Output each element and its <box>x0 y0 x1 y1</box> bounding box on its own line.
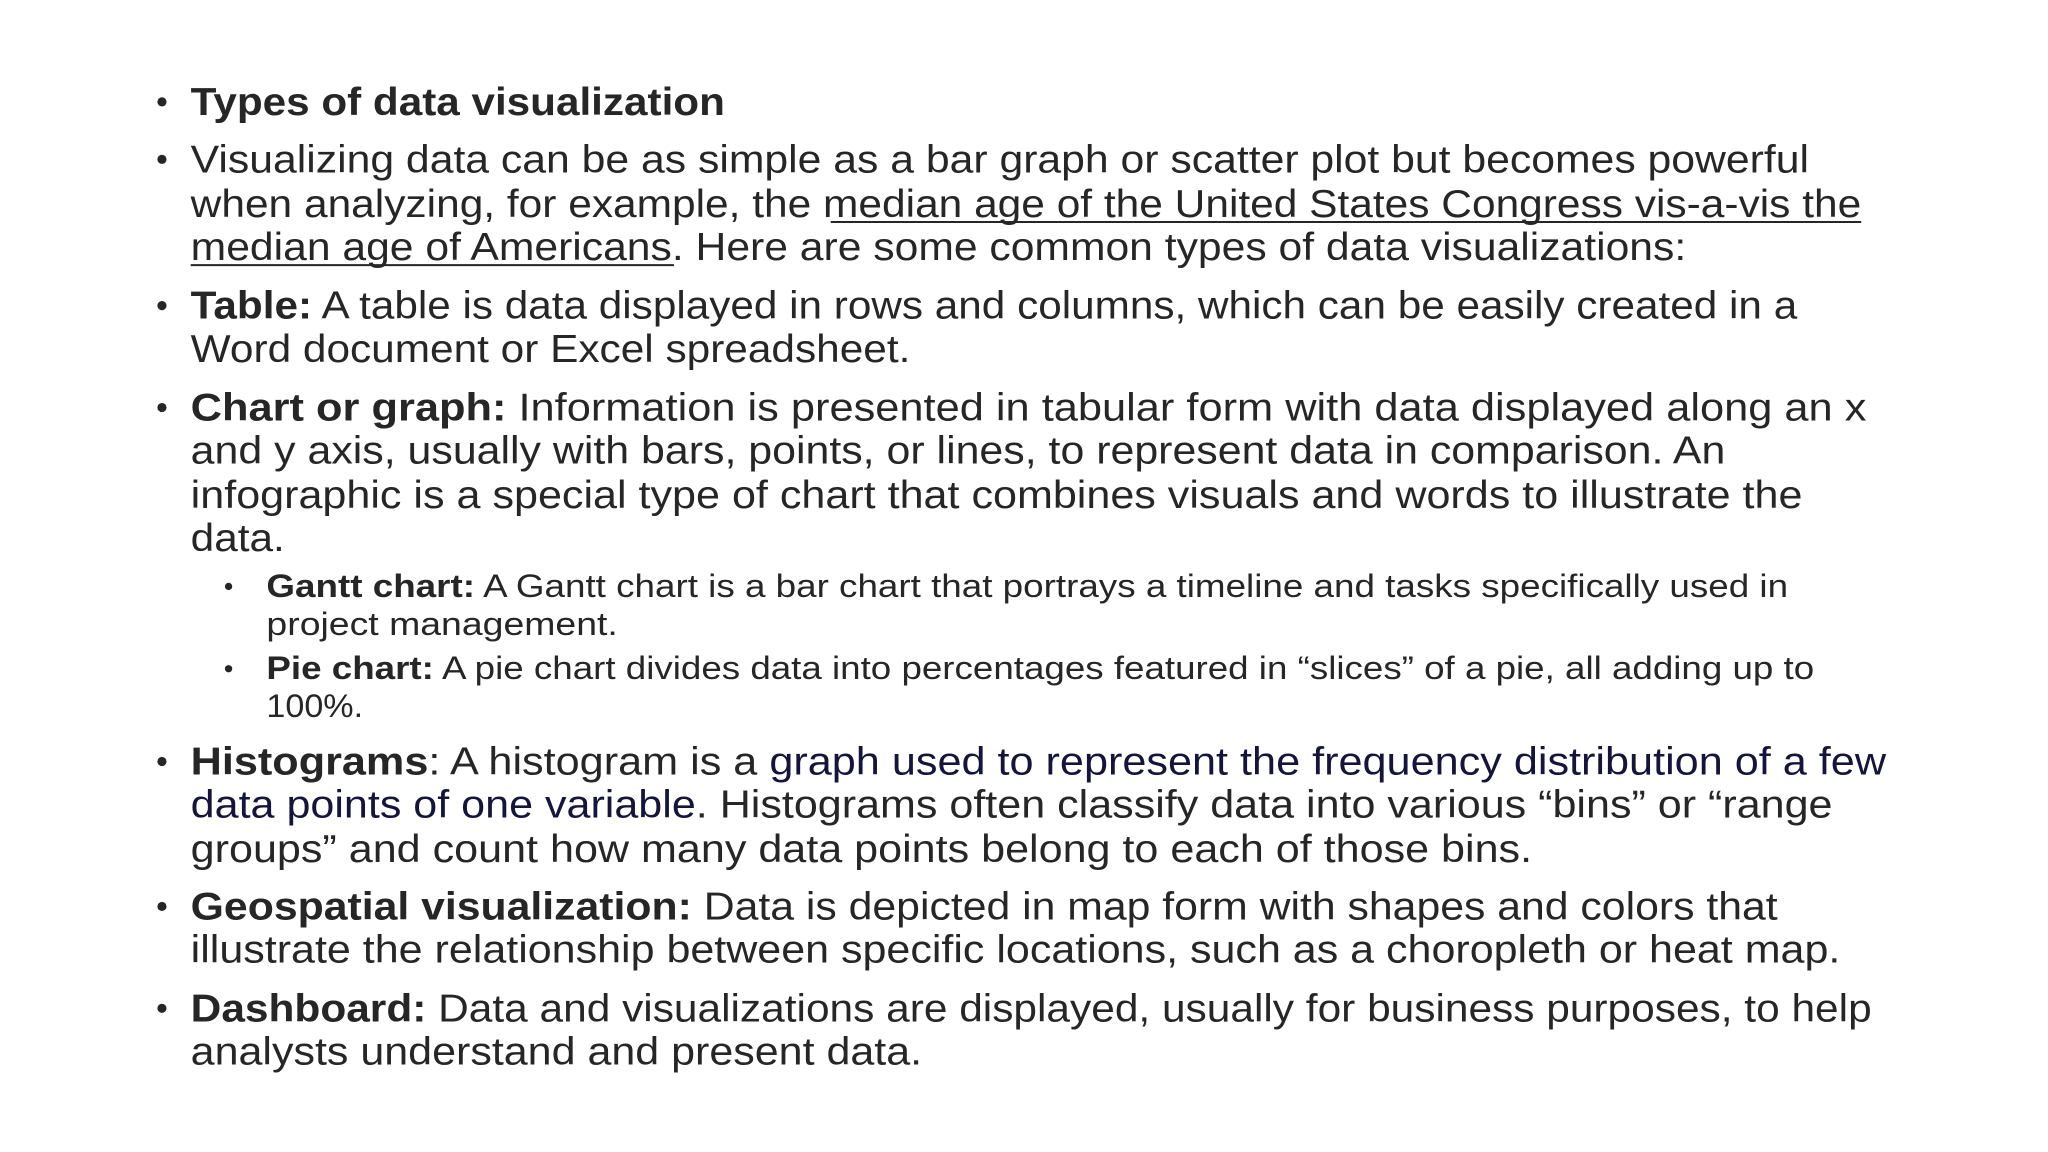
bullet: geospatial <box>157 886 1840 972</box>
sub-bullet: gantt chart: Gantt chart: A Gantt chart is a bar chart that portrays a timeline and tasks specifically used in <box>266 568 1788 604</box>
bullet: types heading: Types of data visualization <box>191 81 725 124</box>
bullet: table: Table: A table is data displayed in rows and columns, which can be easily created in a <box>191 285 1797 328</box>
bullet: histograms <box>157 741 1887 871</box>
bullet: histograms: groups” and count how many data points belong to each of those bins. <box>191 828 1532 871</box>
bullet: table: Word document or Excel spreadsheet. <box>191 328 910 371</box>
bullet: intro paragraph <box>157 138 1861 269</box>
bullet: table <box>157 285 1797 371</box>
sub-bullet: pie chart <box>225 650 1814 724</box>
bullet: histograms: Histograms : A histogram is a graph used to represent the frequency distribution of a few <box>191 741 1887 784</box>
bullet: chart or graph: and y axis, usually with bars, points, or lines, to represent data in comparison. An <box>191 430 1725 473</box>
bullet: dashboard <box>157 987 1872 1073</box>
bullet: geospatial: Geospatial visualization: Data is depicted in map form with shapes and colors that <box>191 886 1778 929</box>
bullet: chart or graph <box>157 387 1867 560</box>
bullet: intro paragraph: median age of Americans. Here are some common types of data visualizations: <box>191 226 1686 269</box>
bullet: intro paragraph: Visualizing data can be as simple as a bar graph or scatter plot but becomes powerful <box>191 138 1809 181</box>
bullet: chart or graph: infographic is a special type of chart that combines visuals and words to illustrate the <box>191 474 1802 517</box>
bullet: intro paragraph: when analyzing, for example, the median age of the United States Congress vis-a-vis the <box>190 183 1861 226</box>
bullet: chart or graph: Chart or graph: Information is presented in tabular form with data displayed along an x <box>191 387 1867 430</box>
bullet: dashboard: analysts understand and present data. <box>191 1030 922 1073</box>
bullet: chart or graph: data. <box>191 517 285 560</box>
bullet: dashboard: Dashboard: Data and visualizations are displayed, usually for business purposes, to help <box>191 987 1872 1030</box>
bullet: histograms: data points of one variable . Histograms often classify data into various “bins” or “range <box>191 784 1832 827</box>
sub-bullet: gantt chart <box>225 568 1788 642</box>
sub-bullet: pie chart: Pie chart: A pie chart divides data into percentages featured in “slices” of a pie, all adding up to <box>266 650 1814 686</box>
bullet: geospatial: illustrate the relationship between specific locations, such as a choropleth or heat map. <box>191 929 1840 972</box>
sub-bullet: pie chart: 100%. <box>266 688 363 724</box>
sub-bullet: gantt chart: project management. <box>266 606 618 642</box>
